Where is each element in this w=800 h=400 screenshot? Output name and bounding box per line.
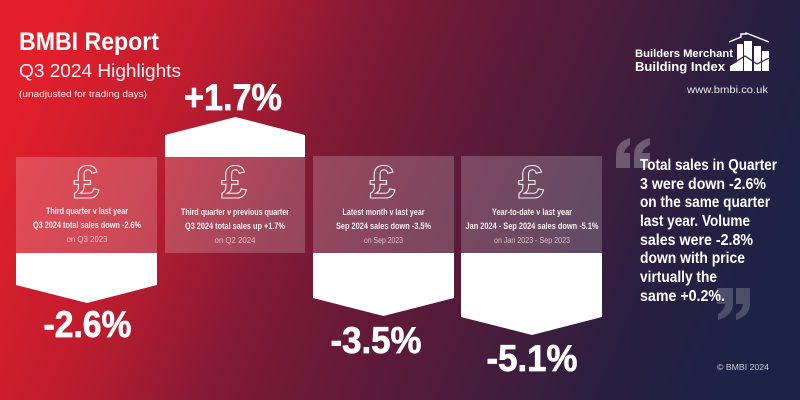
value: -2.6% xyxy=(44,304,132,345)
card text: Jan 2024 - Sep 2024 sales down -5.1% xyxy=(466,221,599,232)
quote text: sales were -2.8% xyxy=(640,232,753,249)
card xyxy=(313,156,454,253)
card text: Q3 2024 total sales up +1.7% xyxy=(185,221,285,232)
panel 4: year-to-date v last year xyxy=(461,156,602,379)
card text: Year-to-date v last year xyxy=(492,207,572,218)
card text: on Sep 2023 xyxy=(364,235,403,245)
card xyxy=(165,157,305,253)
copyright: © BMBI 2024 xyxy=(717,362,769,372)
note: (unadjusted for trading days) xyxy=(19,89,147,100)
quote text: virtually the xyxy=(640,269,717,286)
card text xyxy=(466,207,599,245)
icon: opening quote mark xyxy=(616,138,650,168)
quote text: Total sales in Quarter xyxy=(640,157,777,174)
value: -3.5% xyxy=(330,320,422,361)
title block xyxy=(19,28,181,100)
quote panel xyxy=(616,138,777,372)
panel 2: third quarter v previous quarter xyxy=(165,77,305,253)
website: www.bmbi.co.uk xyxy=(686,85,769,96)
icon: pound sign: £ xyxy=(74,156,100,208)
quote text: last year. Volume xyxy=(640,213,750,230)
logo icon: house with buildings xyxy=(729,33,769,71)
card xyxy=(16,157,157,253)
card text xyxy=(336,207,431,245)
icon: pound sign: £ xyxy=(370,156,396,208)
card text: Latest month v last year xyxy=(342,207,425,218)
down arrow xyxy=(461,253,602,335)
card text: Sep 2024 sales down -3.5% xyxy=(336,221,431,232)
card text: on Q2 2024 xyxy=(214,235,256,245)
icon: pound sign: £ xyxy=(221,156,247,208)
logo: Builders Merchant Building Index xyxy=(635,33,769,96)
logo wordmark xyxy=(635,48,733,74)
panel 1: third quarter v last year xyxy=(16,156,157,345)
quote text: down with price xyxy=(640,250,745,267)
card text: on Q3 2023 xyxy=(66,234,108,244)
card text: on Jan 2023 - Sep 2023 xyxy=(494,235,570,245)
card text: Q3 2024 total sales down -2.6% xyxy=(33,220,141,231)
logo wordmark: Builders Merchant xyxy=(635,48,733,60)
panel 3: latest month v last year xyxy=(313,156,454,361)
quote text xyxy=(640,157,777,305)
card text xyxy=(33,206,141,244)
heading: BMBI Report xyxy=(19,28,160,56)
card text xyxy=(181,207,289,245)
card text: Third quarter v last year xyxy=(46,206,128,217)
icon: pound sign: £ xyxy=(518,156,544,208)
up arrow xyxy=(165,117,305,157)
value: -5.1% xyxy=(486,338,578,379)
card xyxy=(461,156,602,253)
quote text: on the same quarter xyxy=(640,194,770,211)
down arrow xyxy=(313,253,454,316)
value: +1.7% xyxy=(184,77,282,118)
logo wordmark: Building Index xyxy=(635,60,725,74)
subheading: Q3 2024 Highlights xyxy=(19,61,181,81)
quote text: 3 were down -2.6% xyxy=(640,176,766,193)
quote text: same +0.2%. xyxy=(640,288,725,305)
card text: Third quarter v previous quarter xyxy=(181,207,289,218)
down arrow xyxy=(16,253,157,303)
icon: closing quote mark xyxy=(717,288,750,320)
